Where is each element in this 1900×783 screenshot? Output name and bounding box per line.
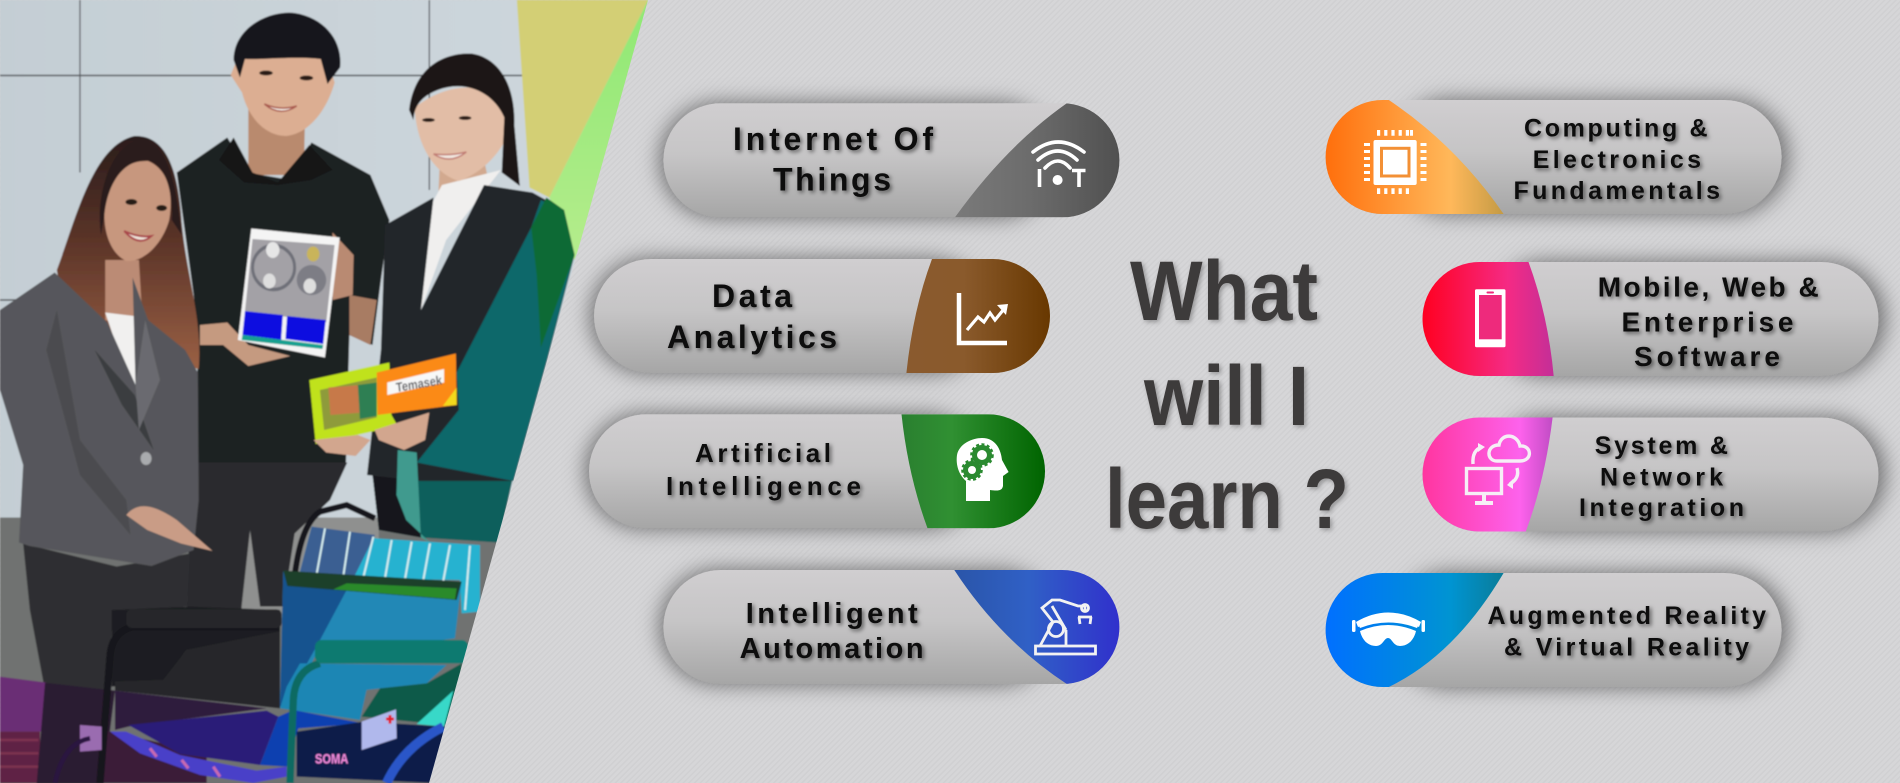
- label: Automation: [740, 633, 924, 665]
- colour end: green: [902, 414, 1050, 528]
- label: & Virtual Reality: [1504, 634, 1749, 662]
- label: [740, 598, 924, 665]
- pill: Artificial Intelligence: [589, 414, 1050, 528]
- icon: head with gears: [957, 438, 1009, 501]
- label: Things: [773, 162, 891, 198]
- seat edge fabric: [110, 732, 287, 783]
- icon: line chart: [959, 293, 1008, 343]
- label: [733, 121, 933, 198]
- icon: IoT wifi: [1033, 142, 1086, 187]
- label: [1579, 432, 1744, 522]
- icon: VR headset: [1352, 612, 1425, 646]
- icon: microchip: [1364, 130, 1426, 194]
- panel: student photo: [0, 0, 673, 783]
- left arm frame: [96, 638, 113, 783]
- black side panel: [115, 632, 280, 708]
- label: Mobile, Web &: [1598, 272, 1819, 303]
- purple bracket: [55, 725, 102, 783]
- logo text: Temasek: [395, 373, 443, 395]
- purple colour shard on floor: [0, 677, 207, 783]
- label: Software: [1634, 341, 1780, 372]
- label: Artificial: [695, 438, 831, 468]
- pill: Mobile, Web and Enterprise Software: [1415, 262, 1878, 376]
- pill: Internet Of Things: [663, 103, 1125, 217]
- chair back frame: [295, 505, 375, 573]
- teal armrest: [315, 640, 468, 663]
- purple tinted panel: [115, 691, 267, 730]
- colour end: red: [1415, 262, 1554, 376]
- colour end: blue: [1320, 573, 1504, 687]
- label: Fundamentals: [1514, 177, 1720, 205]
- heading: What will I learn?: will I: [1143, 349, 1309, 443]
- label: Intelligence: [666, 471, 861, 501]
- heading: What will I learn?: What: [1130, 244, 1318, 338]
- label: Analytics: [667, 319, 837, 355]
- sticker: [362, 709, 397, 750]
- plaid backrest: [300, 527, 480, 613]
- label: [1598, 272, 1819, 372]
- green colour shard: [548, 0, 648, 260]
- pill: Augmented Reality and Virtual Reality: [1320, 573, 1782, 687]
- wall: [0, 0, 576, 783]
- tablet: [238, 228, 340, 358]
- left armrest: [127, 609, 282, 628]
- colour end: brown: [906, 259, 1055, 373]
- heading: What will I learn?: [1105, 244, 1349, 546]
- green side guard: [362, 663, 462, 725]
- shadowed legs behind chair: [112, 607, 280, 687]
- label: Computing &: [1524, 115, 1708, 143]
- brand text: SOMA: [315, 750, 348, 766]
- icon: robot arm: [1036, 600, 1096, 654]
- yellow colour shard: [517, 0, 648, 198]
- pill: Intelligent Automation: [663, 570, 1125, 684]
- label: Data: [712, 278, 792, 314]
- icon: smartphone: [1475, 289, 1506, 347]
- label: Enterprise: [1622, 307, 1794, 338]
- cyan shard: [417, 691, 453, 727]
- colour end: grey: [955, 103, 1125, 217]
- student: left: [0, 136, 213, 783]
- label: Internet Of: [733, 121, 933, 157]
- seat mesh: [128, 710, 363, 767]
- heading: What will I learn?: learn ?: [1105, 452, 1349, 546]
- pill: System and Network Integration: [1415, 418, 1878, 532]
- lower mesh: [280, 663, 447, 720]
- student: middle: [177, 13, 389, 650]
- wheel: [387, 727, 443, 783]
- wheelchair and tinted floor: [0, 505, 480, 783]
- icon: cloud and monitor sync: [1466, 436, 1529, 503]
- label: Electronics: [1533, 146, 1701, 174]
- label: System &: [1595, 432, 1728, 460]
- colour end: orange: [1320, 100, 1504, 214]
- student: right: [367, 53, 575, 542]
- electronics box with Temasek label: [309, 354, 457, 456]
- pill: Computing and Electronics Fundamentals: [1320, 100, 1782, 214]
- label: [1514, 115, 1720, 205]
- label: Intelligent: [746, 598, 918, 630]
- colour end: magenta: [1415, 418, 1553, 532]
- label: Integration: [1579, 494, 1744, 522]
- pill: Data Analytics: [594, 259, 1055, 373]
- label: Augmented Reality: [1488, 602, 1766, 630]
- mesh back panel: [280, 571, 462, 707]
- footrest panel: [297, 722, 447, 783]
- label: [667, 278, 837, 355]
- teal arm frame: [290, 663, 320, 783]
- colour end: blue: [954, 570, 1125, 684]
- label: [666, 438, 861, 501]
- label: Network: [1600, 464, 1723, 492]
- label: [1488, 602, 1766, 662]
